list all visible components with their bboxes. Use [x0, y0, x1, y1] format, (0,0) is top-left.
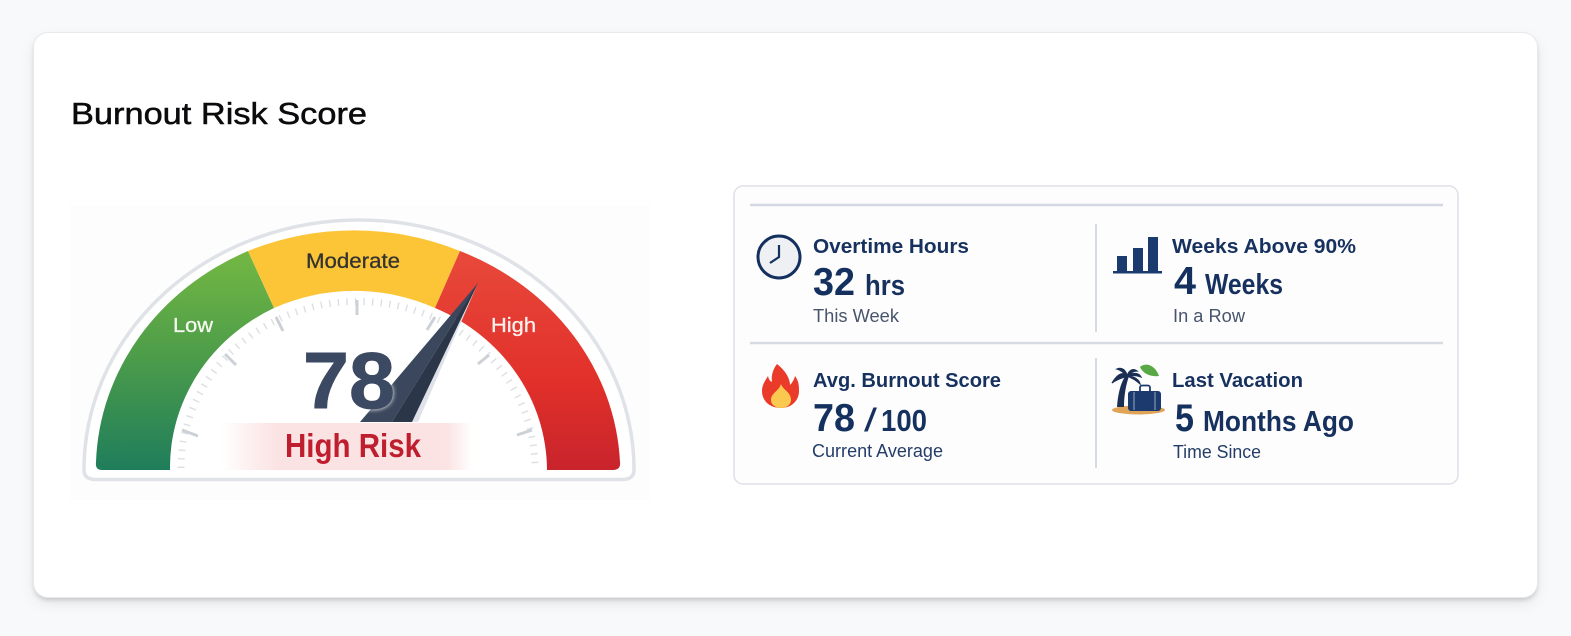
metric: overtime hours: hrs — [865, 270, 905, 302]
metric: overtime hours: This Week — [813, 306, 900, 326]
metric: overtime hours — [758, 236, 969, 326]
risk level banner: High Risk — [285, 427, 422, 464]
metric: average burnout score: Current Average — [812, 441, 943, 461]
metric: last vacation: Time Since — [1173, 442, 1261, 462]
gauge label: high: High — [491, 315, 536, 337]
metric: average burnout score: / — [864, 402, 877, 438]
metric: last vacation: Last Vacation — [1172, 370, 1303, 392]
icon: flame — [762, 364, 799, 408]
gauge label: low: Low — [173, 315, 214, 337]
gauge — [70, 205, 650, 500]
metric: average burnout score: 78 — [813, 397, 855, 440]
title: Burnout Risk Score — [71, 96, 367, 131]
icon: clock — [758, 236, 800, 278]
metric: weeks above 90%: In a Row — [1173, 306, 1246, 326]
metric: weeks above 90% — [1113, 236, 1356, 326]
gauge score value: 78 — [303, 336, 395, 425]
icon: palm tree and suitcase — [1112, 365, 1165, 414]
panel: metrics — [734, 186, 1458, 484]
metric: average burnout score — [762, 364, 1001, 461]
gauge segment: low — [96, 251, 274, 470]
gauge label: moderate: Moderate — [306, 250, 400, 273]
gauge segment: high — [435, 251, 620, 470]
metric: weeks above 90%: 4 — [1174, 260, 1196, 303]
gauge segment: moderate — [248, 230, 460, 308]
metric: overtime hours: Overtime Hours — [813, 236, 969, 258]
risk level banner — [222, 423, 472, 470]
metric: average burnout score: Avg. Burnout Score — [813, 370, 1001, 392]
metric: weeks above 90%: Weeks Above 90% — [1172, 236, 1356, 258]
metric: last vacation — [1112, 365, 1354, 462]
gauge dial frame — [84, 220, 634, 480]
metric: overtime hours: 32 — [813, 261, 855, 304]
metric: weeks above 90%: Weeks — [1205, 269, 1283, 301]
metric: average burnout score: 100 — [881, 403, 927, 438]
metric: last vacation: 5 — [1175, 397, 1194, 440]
gauge needle — [360, 283, 478, 422]
metric: last vacation: Months Ago — [1203, 406, 1354, 438]
gauge tick marks — [181, 300, 535, 468]
icon: bar chart — [1113, 237, 1162, 274]
